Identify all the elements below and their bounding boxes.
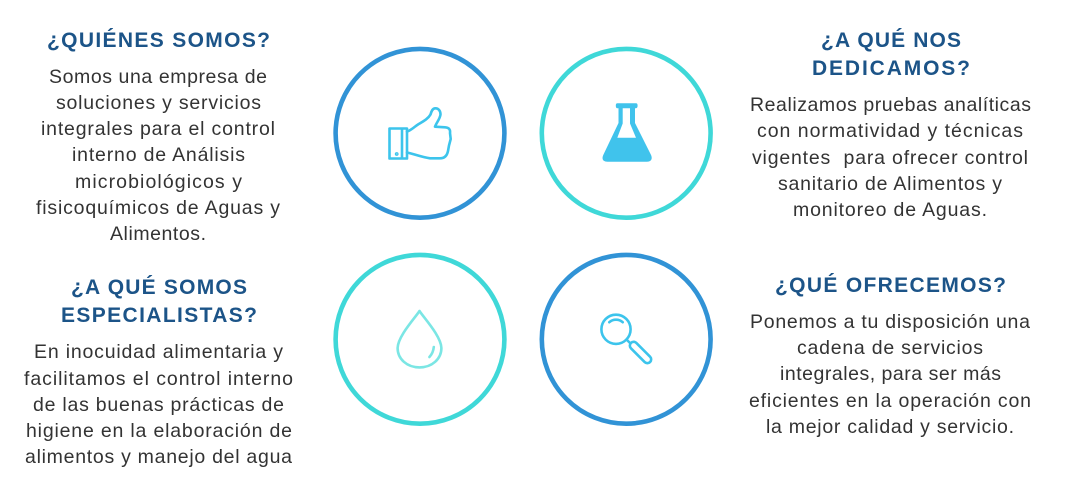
text block: quiénes somos — [36, 66, 280, 245]
panel: a qué somos especialistas — [24, 276, 293, 468]
circle: flask — [542, 49, 711, 218]
panel: a qué nos dedicamos — [750, 29, 1031, 221]
circle: water drop — [336, 255, 504, 424]
text block: quiénes somos: fisicoquímicos de Aguas y — [36, 197, 280, 219]
text block: qué ofrecemos: la mejor calidad y servicio. — [766, 416, 1014, 438]
text block: a qué nos dedicamos — [750, 94, 1031, 221]
text block: a qué somos especialistas: alimentos y manejo del agua — [25, 446, 292, 468]
text block: quiénes somos: Alimentos. — [110, 223, 206, 245]
heading: quiénes somos: ¿QUIÉNES SOMOS? — [47, 29, 270, 52]
text block: quiénes somos: interno de Análisis — [72, 144, 245, 166]
heading: a qué nos dedicamos — [812, 29, 970, 80]
text block: a qué nos dedicamos: Realizamos pruebas analíticas — [750, 94, 1031, 116]
text block: a qué somos especialistas: En inocuidad alimentaria y — [34, 341, 283, 363]
heading: a qué somos especialistas: ESPECIALISTAS? — [61, 304, 257, 327]
text block: a qué nos dedicamos: monitoreo de Aguas. — [793, 199, 987, 221]
text block: a qué nos dedicamos: sanitario de Alimentos y — [778, 173, 1002, 195]
heading: qué ofrecemos: ¿QUÉ OFRECEMOS? — [775, 274, 1006, 297]
text block: qué ofrecemos — [749, 311, 1031, 438]
text block: qué ofrecemos: integrales, para ser más — [780, 363, 1001, 385]
circle: thumbs up — [336, 49, 504, 218]
heading: a qué somos especialistas: ¿A QUÉ SOMOS — [71, 276, 247, 299]
text block: a qué somos especialistas: facilitamos el control interno — [24, 368, 293, 390]
text block: qué ofrecemos: eficientes en la operación con — [749, 390, 1031, 412]
text block: quiénes somos: integrales para el control — [41, 118, 275, 140]
text block: quiénes somos: soluciones y servicios — [56, 92, 261, 114]
icon: magnifier — [601, 315, 653, 365]
heading: a qué nos dedicamos: DEDICAMOS? — [812, 57, 970, 80]
text block: quiénes somos: microbiológicos y — [75, 171, 242, 193]
icon: water drop — [398, 311, 441, 367]
text block: a qué somos especialistas — [24, 341, 293, 468]
circle: magnifier — [542, 255, 711, 424]
icon: flask — [603, 103, 652, 162]
text block: qué ofrecemos: Ponemos a tu disposición una — [750, 311, 1030, 333]
text block: a qué somos especialistas: higiene en la elaboración de — [26, 420, 292, 442]
text block: qué ofrecemos: cadena de servicios — [797, 337, 983, 359]
text block: a qué nos dedicamos: con normatividad y técnicas — [757, 120, 1023, 142]
text block: a qué somos especialistas: de las buenas prácticas de — [33, 394, 284, 416]
heading: a qué nos dedicamos: ¿A QUÉ NOS — [821, 29, 961, 52]
text block: a qué nos dedicamos: vigentes para ofrecer control — [752, 147, 1028, 169]
heading: a qué somos especialistas — [61, 276, 257, 327]
icon: thumbs up — [390, 108, 451, 158]
panel: qué ofrecemos — [749, 274, 1031, 438]
panel: quiénes somos — [36, 29, 280, 245]
text block: quiénes somos: Somos una empresa de — [49, 66, 267, 88]
